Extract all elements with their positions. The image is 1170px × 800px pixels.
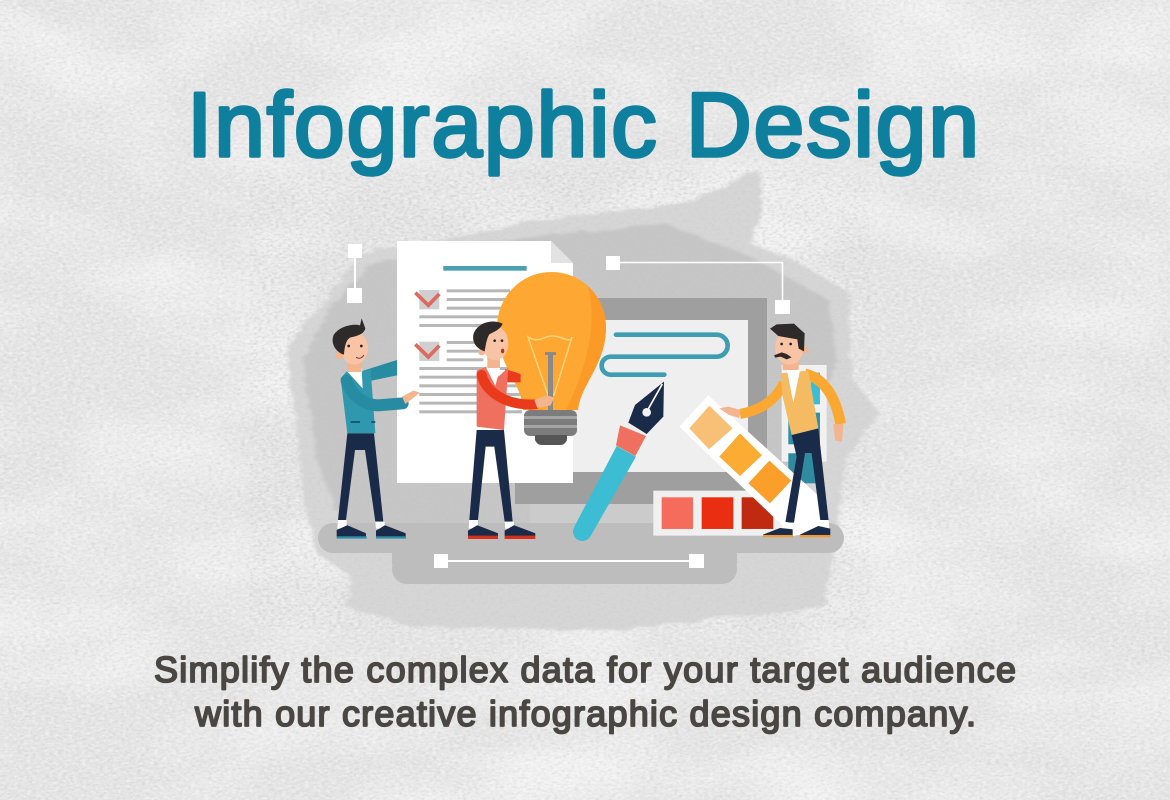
man in teal jacket	[333, 318, 420, 539]
selection handle: top left	[347, 244, 362, 303]
man in red sweater	[468, 322, 554, 539]
paperclip line on monitor	[602, 335, 728, 375]
colour chart behind right man	[782, 365, 827, 483]
subtitle	[154, 649, 1016, 734]
monitor	[515, 298, 767, 523]
watermark logo: abhishek	[1033, 85, 1131, 110]
subtitle: with our creative infographic design company.	[194, 693, 976, 734]
light bulb	[497, 272, 606, 445]
bottom colour swatch card	[653, 491, 787, 536]
orange swatch strip	[679, 395, 829, 536]
platform	[318, 523, 844, 584]
texture over brush	[250, 170, 870, 630]
subtitle: Simplify the complex data for your target audience	[154, 649, 1016, 690]
watermark logo	[1033, 42, 1131, 110]
selection handle: bottom	[434, 554, 704, 568]
title: Infographic Design	[187, 75, 979, 176]
grey brush stroke backdrop	[286, 170, 881, 630]
selection handle: top right	[606, 256, 790, 314]
man with moustache	[719, 324, 843, 537]
fountain pen	[573, 382, 664, 541]
document	[397, 241, 573, 483]
checklist	[415, 266, 527, 413]
